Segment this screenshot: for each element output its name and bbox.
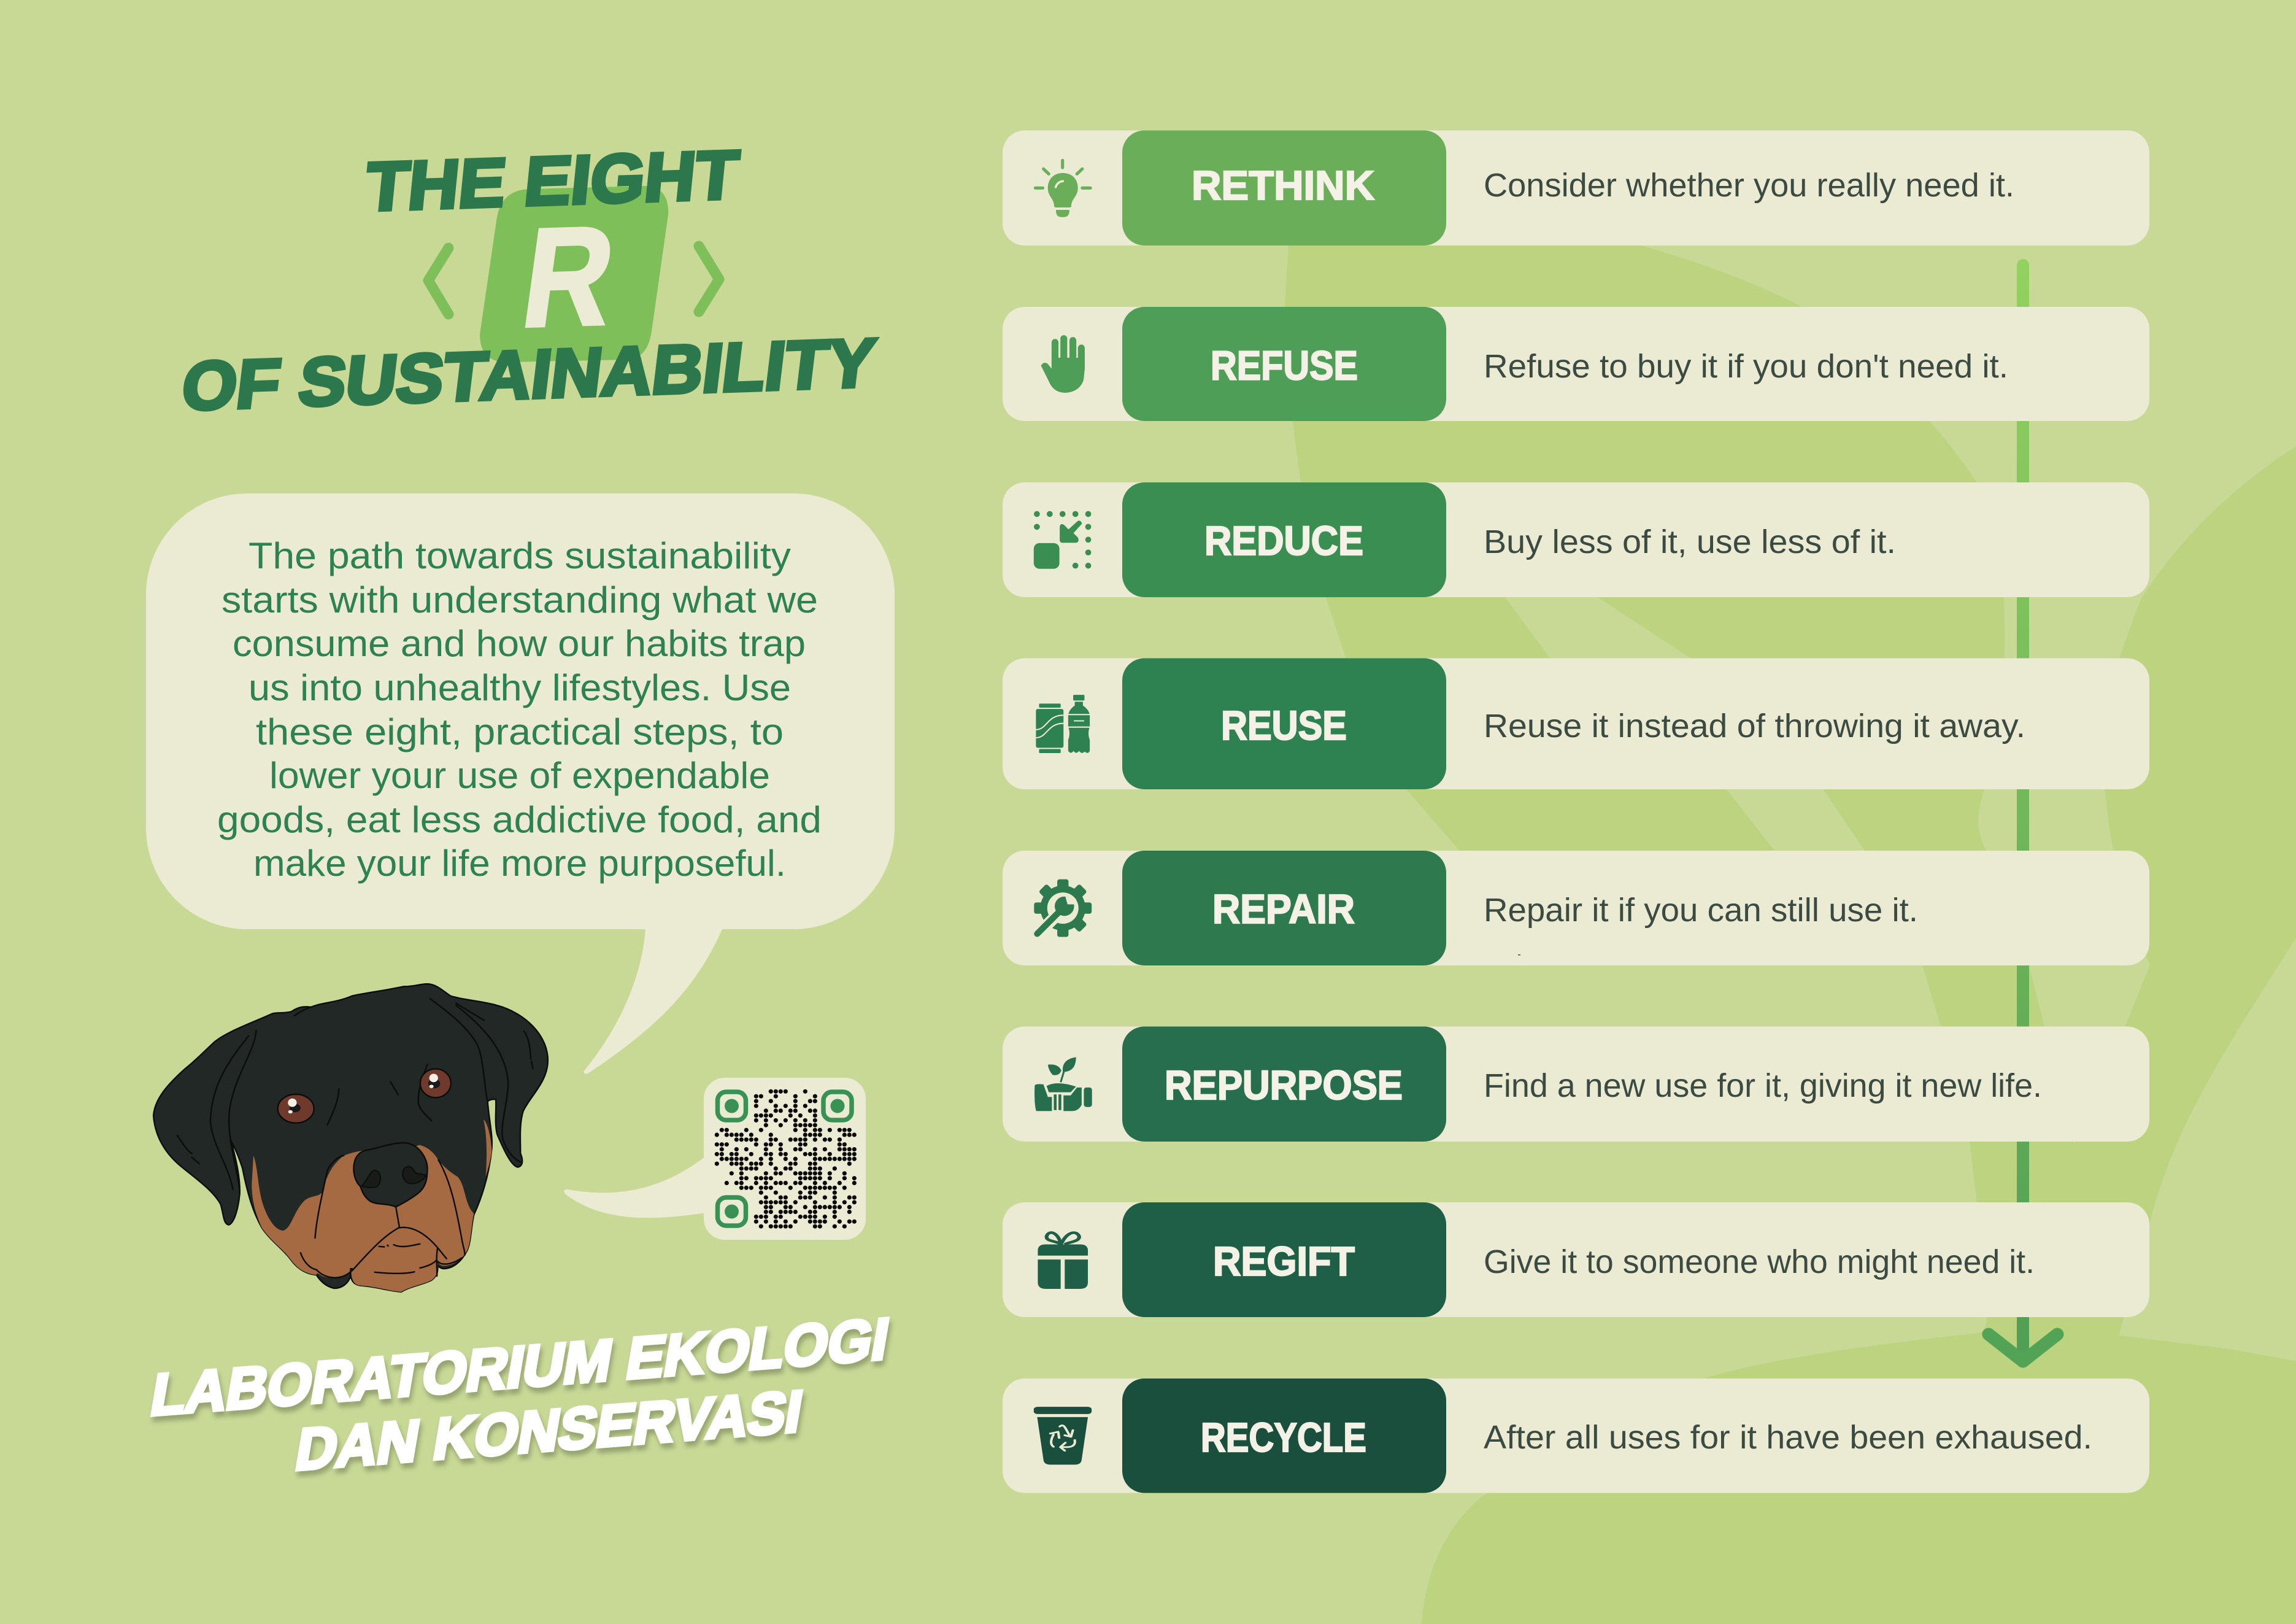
row card	[1003, 482, 2149, 597]
intro paragraph: consume and how our habits trap	[233, 623, 806, 664]
bubble shape	[146, 493, 895, 1074]
description: Reuse it instead of throwing it away.	[1484, 708, 2025, 744]
row: reuse	[1003, 658, 2149, 789]
QR finder patterns	[718, 1092, 852, 1226]
row card	[1003, 658, 2149, 789]
description: Repair it if you can still use it.	[1484, 892, 1918, 929]
intro paragraph: us into unhealthy lifestyles. Use	[248, 667, 791, 708]
intro paragraph: goods, eat less addictive food, and	[217, 799, 822, 840]
label: REUSE	[1221, 703, 1347, 749]
row card	[1003, 1202, 2149, 1317]
row card	[1003, 1026, 2149, 1142]
row: rethink	[1003, 130, 2149, 246]
row: refuse	[1003, 307, 2149, 421]
icon: light bulb	[1035, 160, 1090, 217]
icon: reduce arrow	[1034, 511, 1091, 569]
intro paragraph: lower your use of expendable	[269, 755, 770, 796]
icon: gear and wrench	[1033, 880, 1092, 939]
R letter: R	[514, 197, 623, 357]
row card	[1003, 1378, 2149, 1493]
flow arrow	[1989, 259, 2057, 1361]
arrow head	[1989, 1334, 2057, 1361]
label: REPAIR	[1212, 886, 1355, 932]
label pill	[1122, 1378, 1446, 1493]
QR callout tail	[564, 1156, 706, 1218]
name line two: DAN KONSERVASI	[291, 1378, 807, 1483]
row: reduce	[1003, 482, 2149, 597]
rottweiler head illustration	[153, 984, 548, 1292]
label pill	[1122, 130, 1446, 246]
label pill	[1122, 658, 1446, 789]
icon: raised hand	[1041, 335, 1085, 393]
label pill	[1122, 1202, 1446, 1317]
label: REFUSE	[1211, 342, 1358, 389]
row card	[1003, 307, 2149, 421]
description: After all uses for it have been exhaused.	[1484, 1419, 2092, 1456]
row card	[1003, 130, 2149, 246]
row: regift	[1003, 1202, 2149, 1317]
row: repurpose	[1003, 1026, 2149, 1142]
title line: Of Sustainability: OF SUSTAINABILITY	[178, 323, 879, 425]
label: REPURPOSE	[1165, 1062, 1403, 1108]
right chevron	[699, 246, 719, 312]
title group	[178, 136, 879, 425]
row: repair	[1003, 851, 2149, 965]
description: Refuse to buy it if you don't need it.	[1484, 348, 2008, 385]
QR data modules	[717, 1091, 854, 1226]
label pill	[1122, 307, 1446, 421]
description: Find a new use for it, giving it new life.	[1484, 1067, 2042, 1104]
label pill	[1122, 851, 1446, 965]
R badge background	[480, 186, 668, 362]
description: Consider whether you really need it.	[1484, 167, 2014, 204]
left chevron	[428, 248, 449, 314]
intro paragraph: starts with understanding what we	[222, 579, 818, 621]
icon: can and bottle	[1036, 695, 1090, 753]
intro paragraph: The path towards sustainability	[248, 535, 791, 576]
speech bubble	[146, 493, 895, 1074]
label: RECYCLE	[1201, 1415, 1366, 1461]
arrow shaft	[2017, 259, 2029, 1361]
background leaf shapes	[1285, 225, 2296, 1624]
title line: The Eight: THE EIGHT	[363, 136, 742, 225]
label: RETHINK	[1192, 163, 1374, 209]
QR card	[704, 1078, 866, 1240]
label: REGIFT	[1213, 1239, 1355, 1285]
intro paragraph	[217, 535, 822, 884]
label: REDUCE	[1204, 518, 1363, 564]
intro paragraph: make your life more purposeful.	[253, 843, 786, 884]
row card	[1003, 851, 2149, 965]
QR finder dots	[725, 1099, 844, 1219]
QR code callout	[564, 1078, 866, 1240]
icon: recycle bin	[1034, 1407, 1092, 1464]
icon: gift box	[1038, 1232, 1088, 1289]
intro paragraph: these eight, practical steps, to	[256, 711, 784, 752]
label pill	[1122, 1026, 1446, 1142]
description: Buy less of it, use less of it.	[1484, 524, 1896, 560]
icon: plant in hand	[1034, 1057, 1092, 1111]
name line one: LABORATORIUM EKOLOGI	[146, 1305, 894, 1428]
label pill	[1122, 482, 1446, 597]
laboratory name	[146, 1305, 894, 1483]
row: recycle	[1003, 1378, 2149, 1493]
description: Give it to someone who might need it.	[1484, 1243, 2035, 1280]
